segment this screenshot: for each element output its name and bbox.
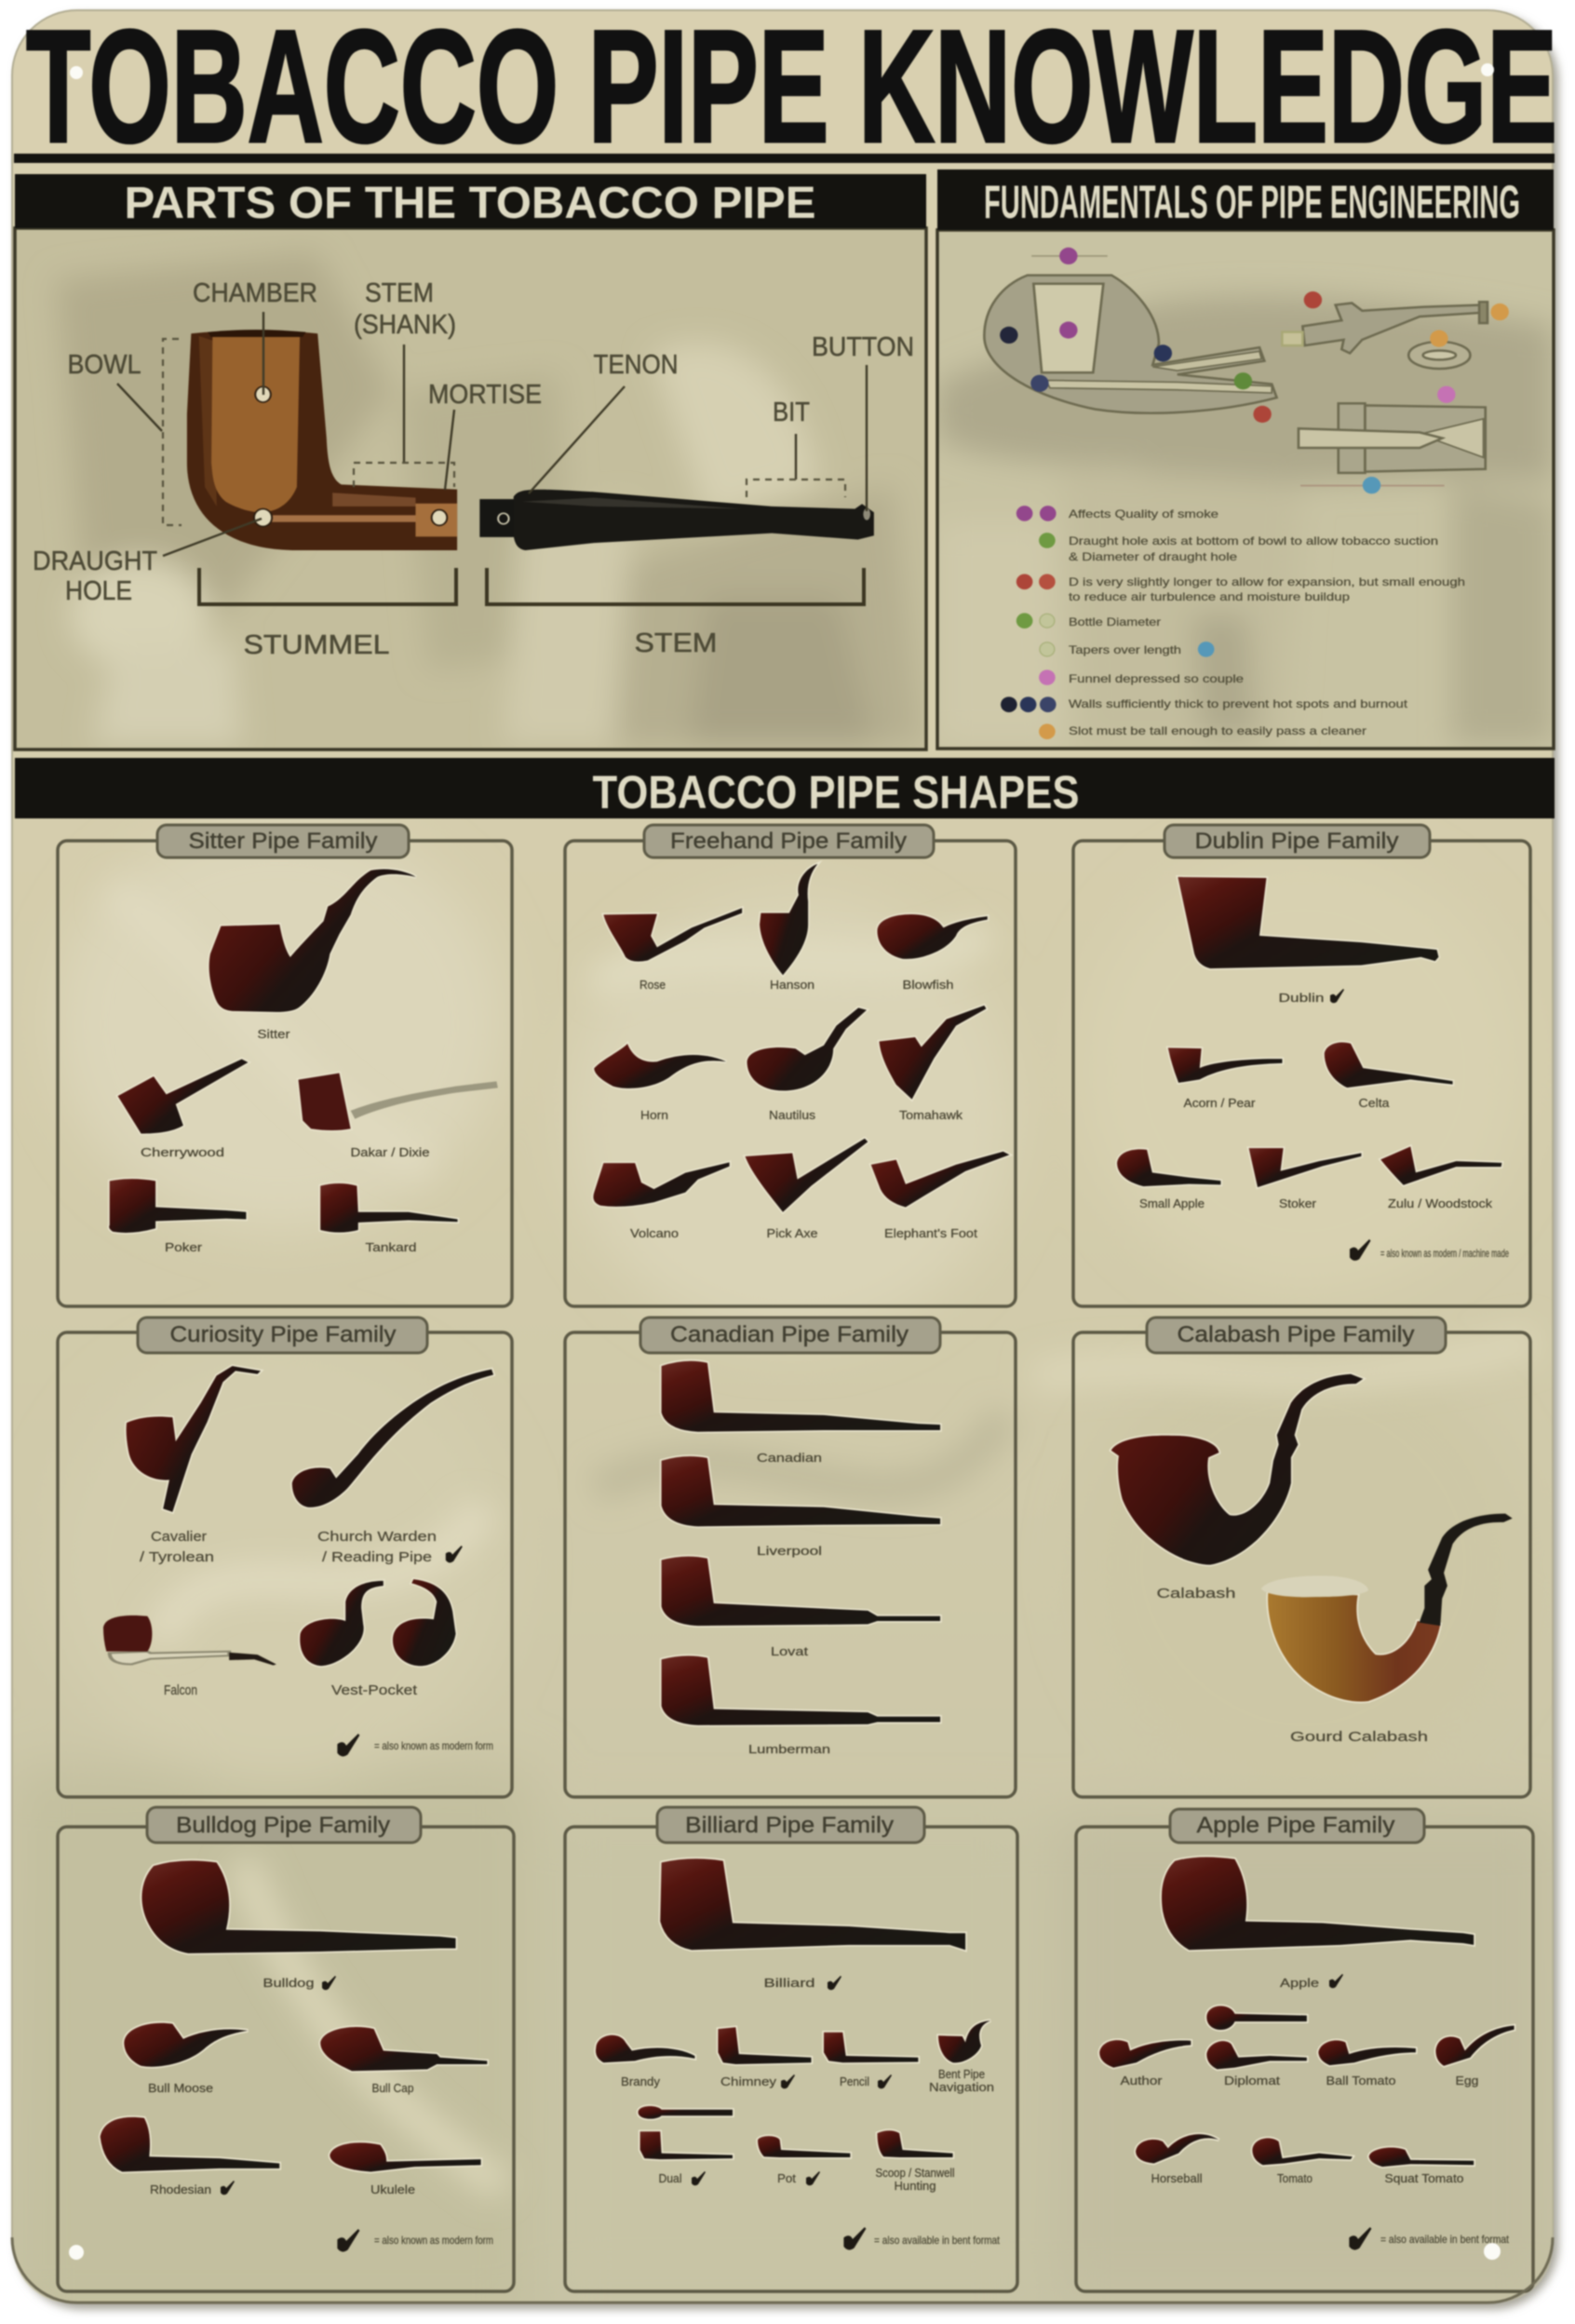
pipe: acorn pear (1168, 1047, 1282, 1083)
legend: check note (337, 1734, 493, 1756)
bracket: stem (487, 568, 864, 604)
pipe: diplomat top view (1206, 2006, 1307, 2030)
pipe name labels: Zulu / Woodstock (1388, 1196, 1493, 1210)
pipe: nautilus (747, 1007, 867, 1090)
title rule (14, 154, 1555, 163)
pipe: dual (640, 2131, 733, 2159)
pipe name labels (140, 1529, 437, 1698)
panel: bulldog pipe family (58, 1807, 514, 2291)
pipe: dual top view (639, 2106, 733, 2119)
pipe name labels: / Reading Pipe (322, 1549, 432, 1565)
pipe: falcon (103, 1615, 276, 1665)
pipe: dakar dixie stem (351, 1081, 498, 1119)
pipe name labels: Scoop / Stanwell (875, 2166, 955, 2180)
part labels: BIT (773, 398, 810, 427)
tab: bulldog pipe family (147, 1807, 421, 1843)
tab: billiard pipe family (657, 1807, 924, 1843)
bulldog pipes (101, 1860, 487, 2172)
pipe name labels: Dakar / Dixie (350, 1145, 430, 1159)
dublin pipes (1117, 877, 1501, 1187)
pipe name labels: Bent Pipe (938, 2067, 985, 2081)
pipe: canadian (662, 1361, 940, 1432)
legend: check note (337, 2229, 493, 2251)
pipe name labels: Stoker (1279, 1196, 1317, 1210)
pipe: dublin (1178, 877, 1438, 968)
pipe name labels: Ukulele (370, 2182, 415, 2196)
pipe: rose (603, 908, 742, 962)
pipe name labels: Gourd Calabash (1290, 1729, 1428, 1745)
pipe: rhodesian (101, 2117, 279, 2172)
pipe: pot (758, 2136, 850, 2157)
tab: dublin pipe family (1164, 825, 1430, 858)
pipe: church warden (292, 1370, 493, 1507)
pipe: diplomat (1206, 2041, 1307, 2069)
section heading: tobacco pipe shapes: TOBACCO PIPE SHAPES (592, 766, 1080, 818)
pipe name labels (1139, 991, 1493, 1210)
legend: check note (1350, 1239, 1509, 1261)
pipe name labels: Sitter (257, 1027, 290, 1041)
panel: freehand pipe family (565, 825, 1016, 1306)
pipe name labels: Egg (1456, 2074, 1478, 2088)
pipe: small apple (1117, 1149, 1220, 1186)
tab: billiard pipe family: Billiard Pipe Family (685, 1813, 894, 1838)
diagram: pipe cross-section (984, 276, 1277, 413)
tab: sitter pipe family (157, 825, 409, 858)
legend: check note: = also available in bent format (874, 2234, 1001, 2247)
leader lines and dashed outlines (117, 312, 867, 556)
pipe name labels: Squat Tomato (1385, 2171, 1463, 2185)
pipe: tomahawk (879, 1006, 986, 1100)
legend text: & Diameter of draught hole (1069, 550, 1237, 563)
legend text: Walls sufficiently thick to prevent hot spots and burnout (1069, 697, 1408, 710)
part labels: TENON (594, 350, 678, 380)
part labels: STEM (365, 278, 434, 308)
pipe: poker (109, 1179, 246, 1233)
tab: curiosity pipe family (138, 1317, 427, 1353)
diagram: mouthpiece side view (1282, 302, 1488, 369)
pipe name labels: Billiard (763, 1976, 815, 1990)
legend text: Funnel depressed so couple (1069, 672, 1244, 685)
pipe: chimney (718, 2027, 811, 2064)
icon: check beside bulldog (322, 1976, 336, 1990)
pipe name labels: Small Apple (1139, 1196, 1205, 1210)
pipe name labels: Hunting (894, 2179, 936, 2193)
pipe: squat tomato (1369, 2148, 1474, 2167)
pipe name labels: Apple (1280, 1976, 1319, 1990)
pipe name labels: Author (1121, 2074, 1163, 2088)
pipe: brandy (596, 2035, 694, 2062)
pipe name labels: Bull Moose (148, 2081, 213, 2095)
sheet bottom bevel (12, 2237, 1553, 2303)
pipe name labels: Tankard (365, 1240, 417, 1254)
pipe name labels: Canadian (757, 1451, 822, 1465)
freehand pipes (593, 864, 1009, 1212)
pipe: gourd calabash (1261, 1514, 1513, 1701)
pipe name labels: Diplomat (1224, 2074, 1280, 2088)
tab: freehand pipe family (644, 825, 934, 858)
background swirl pattern (13, 819, 1555, 2324)
pipe: billiard (660, 1858, 965, 1950)
pipe name labels: Horn (640, 1108, 668, 1122)
legend text: Affects Quality of smoke (1069, 507, 1218, 520)
legend text: D is very slightly longer to allow for expansion, but small enough (1069, 575, 1465, 588)
panel heading bar (15, 174, 926, 228)
panel: billiard pipe family (565, 1807, 1017, 2291)
panel: parts of the tobacco pipe (15, 174, 926, 750)
pipe: cherrywood (118, 1059, 248, 1133)
pipe name labels: Navigation (929, 2080, 994, 2094)
pipe name labels: Bulldog (262, 1976, 315, 1990)
icons: checks beside billiard pipes (692, 1976, 892, 2185)
part labels: BOWL (67, 350, 141, 380)
pipe: bent pipe (938, 2020, 990, 2062)
icon: check beside rhodesian (221, 2181, 235, 2195)
pipe name labels: Bull Cap (372, 2081, 413, 2095)
part labels: DRAUGHT (33, 547, 157, 576)
pipe: liverpool (662, 1456, 940, 1526)
pipe: vest pocket left (300, 1581, 384, 1666)
pipe: zulu woodstock (1380, 1146, 1501, 1185)
tab: calabash pipe family (1147, 1317, 1446, 1353)
pipe name labels: Poker (165, 1240, 203, 1254)
pipe name labels: Hanson (770, 978, 814, 992)
pipe name labels (630, 978, 977, 1240)
pipe: bull cap (320, 2027, 487, 2071)
part labels: MORTISE (428, 380, 542, 410)
pipe: author (1099, 2040, 1191, 2068)
pipe name labels: Chimney (720, 2074, 777, 2088)
pipe: egg (1435, 2025, 1514, 2066)
pipe: horseball (1136, 2134, 1219, 2163)
pipe: lovat (662, 1557, 940, 1626)
pipe name labels: Rose (639, 978, 666, 992)
part labels: CHAMBER (193, 278, 317, 308)
pipe name labels: Pencil (840, 2074, 869, 2088)
tab: apple pipe family: Apple Pipe Family (1197, 1813, 1394, 1838)
pipe: pick axe (745, 1139, 868, 1212)
panel: sitter pipe family (58, 825, 512, 1306)
pipe name labels: Tomahawk (899, 1108, 963, 1122)
pipe: blowfish (877, 914, 988, 959)
pipe name labels: Rhodesian (150, 2182, 211, 2196)
pipe name labels: Cherrywood (141, 1145, 224, 1159)
tab: dublin pipe family: Dublin Pipe Family (1195, 829, 1398, 854)
pipe: vest pocket right (393, 1579, 456, 1666)
pipe name labels: Dual (659, 2171, 682, 2185)
panel heading bar: PARTS OF THE TOBACCO PIPE (125, 179, 815, 228)
pipe name labels: Cavalier (151, 1529, 207, 1545)
diagram: stummel cutaway (187, 330, 457, 550)
tab: bulldog pipe family: Bulldog Pipe Family (176, 1813, 390, 1838)
diagram: mouthpiece stem (479, 490, 874, 550)
tab: sitter pipe family: Sitter Pipe Family (188, 829, 378, 854)
pipe: celtic (1325, 1043, 1453, 1088)
tab: canadian pipe family: Canadian Pipe Family (670, 1322, 909, 1347)
part labels: STEM (635, 628, 717, 658)
legend text: Tapers over length (1069, 643, 1181, 656)
pipe: scoop (877, 2130, 953, 2157)
panel: curiosity pipe family (58, 1317, 512, 1797)
section heading: tobacco pipe shapes (15, 758, 1555, 818)
pipe name labels: Dublin (1279, 991, 1324, 1005)
panel: apple pipe family (1076, 1809, 1533, 2291)
pipe: bull moose (124, 2023, 248, 2067)
pipe name labels: Acorn / Pear (1184, 1096, 1256, 1110)
pipe name labels: Calabash (1156, 1586, 1236, 1601)
pipe: ball tomato (1318, 2040, 1416, 2065)
pipe name labels: Pick Axe (767, 1226, 817, 1240)
part labels: (SHANK) (354, 310, 456, 340)
pipe name labels: Ball Tomato (1326, 2074, 1396, 2088)
pipe: lumberman (662, 1655, 940, 1725)
pipe name labels (1156, 1586, 1428, 1745)
calabash pipes (1111, 1374, 1513, 1701)
pipe name labels: Church Warden (317, 1529, 437, 1545)
apple pipes (1099, 1857, 1514, 2167)
legend: check note: = also known as modern form (374, 1739, 493, 1752)
icon: check beside apple (1329, 1974, 1343, 1988)
legend: check note (1349, 2227, 1510, 2250)
diagram: tenon and mortise (1299, 403, 1486, 473)
panel: fundamentals of pipe engineering (937, 169, 1554, 749)
pipe name labels: Celta (1359, 1096, 1390, 1110)
pipe: dakar dixie bowl (299, 1074, 351, 1130)
legend text: Slot must be tall enough to easily pass a cleaner (1069, 724, 1366, 737)
sitter pipes (109, 870, 498, 1233)
pipe name labels (148, 1976, 415, 2196)
tab: canadian pipe family (640, 1317, 940, 1353)
legend dots (1001, 506, 1214, 739)
tab: apple pipe family (1170, 1809, 1424, 1843)
part labels: BUTTON (812, 332, 914, 362)
pipe: tomato (1252, 2138, 1353, 2165)
pipe name labels: Volcano (630, 1226, 679, 1240)
pipe: stoker (1249, 1148, 1361, 1187)
pipe name labels: Horseball (1151, 2171, 1203, 2185)
legend text: to reduce air turbulence and moisture buildup (1069, 590, 1350, 603)
legend: check note: = also available in bent format (1380, 2233, 1510, 2246)
pipe: sitter (209, 870, 416, 1012)
pipe: bulldog (141, 1860, 456, 1953)
pipe name labels: Blowfish (903, 978, 953, 992)
pipe: volcano (593, 1162, 730, 1207)
pipe name labels: Liverpool (757, 1544, 822, 1558)
pipe: pencil (824, 2033, 918, 2062)
pipe name labels: Falcon (164, 1682, 197, 1698)
pipe: cavalier tyrolean (127, 1366, 261, 1512)
part labels (33, 278, 914, 660)
bracket: stummel (199, 568, 456, 604)
legend: check note: = also known as modern form (374, 2234, 493, 2247)
pipe name labels (141, 1027, 430, 1254)
billiard pipes (596, 1858, 990, 2159)
pipe: elephant's foot (871, 1152, 1009, 1207)
pipe: hanson (760, 864, 817, 975)
pipe name labels: Elephant's Foot (884, 1226, 977, 1240)
pipe name labels (748, 1451, 830, 1756)
pipe name labels: Vest-Pocket (331, 1682, 418, 1698)
icon: check beside dublin (1330, 989, 1344, 1003)
legend text: Bottle Diameter (1069, 615, 1161, 628)
panel: calabash pipe family (1073, 1317, 1530, 1797)
pipe: tankard (320, 1183, 458, 1233)
curiosity pipes (103, 1366, 493, 1666)
pipe name labels: Lovat (771, 1644, 808, 1658)
pipe name labels: Tomato (1277, 2171, 1312, 2185)
part labels: STUMMEL (244, 630, 389, 660)
legend text: Draught hole axis at bottom of bowl to allow tobacco suction (1069, 534, 1438, 547)
tab: calabash pipe family: Calabash Pipe Family (1177, 1322, 1415, 1347)
legend text (1069, 507, 1465, 737)
pipe name labels: Lumberman (748, 1742, 830, 1756)
pipe: ukulele (330, 2142, 481, 2172)
pipe: horn (594, 1044, 726, 1088)
pipe: apple (1162, 1857, 1474, 1950)
canadian pipes (662, 1361, 940, 1725)
panel: dublin pipe family (1073, 825, 1530, 1306)
tab: freehand pipe family: Freehand Pipe Family (670, 829, 907, 854)
pipe: calabash (1111, 1374, 1363, 1565)
icon: check beside church warden (446, 1546, 463, 1562)
pipe name labels: Pot (777, 2171, 796, 2185)
pipe name labels (1121, 1976, 1478, 2185)
pipe name labels: Nautilus (769, 1108, 816, 1122)
pipe name labels (621, 1976, 994, 2193)
pipe name labels: Brandy (621, 2074, 660, 2088)
pipe name labels: / Tyrolean (140, 1549, 214, 1565)
legend: check note (843, 2227, 1001, 2250)
panel: canadian pipe family (565, 1317, 1016, 1797)
tab: curiosity pipe family: Curiosity Pipe Family (169, 1322, 397, 1347)
diagram callout dots (1000, 248, 1509, 493)
part labels: HOLE (65, 576, 132, 606)
